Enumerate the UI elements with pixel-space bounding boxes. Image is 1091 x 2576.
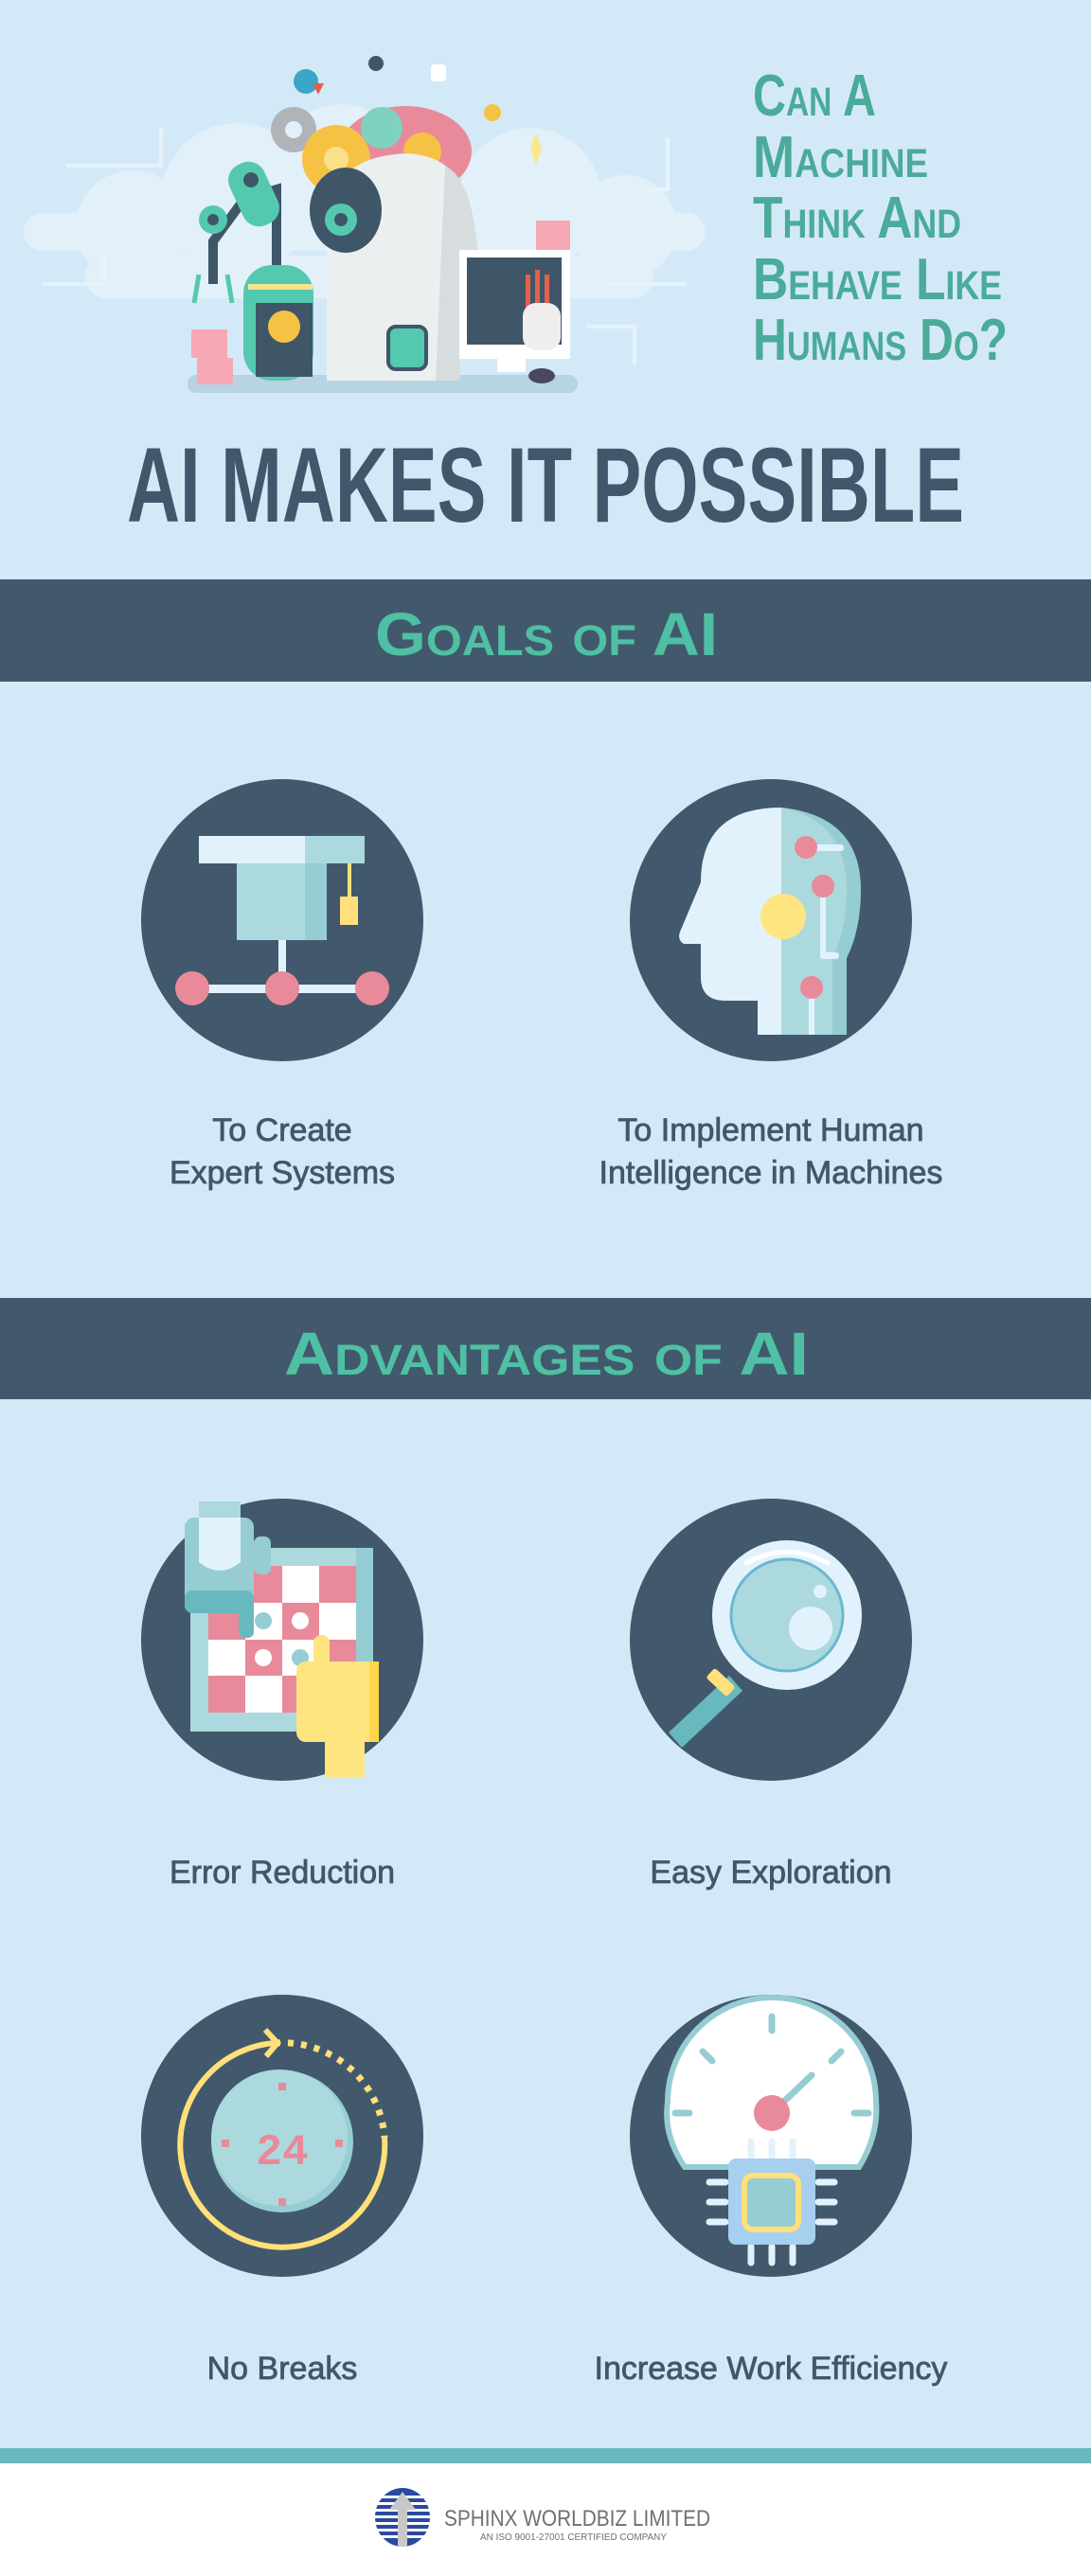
band: goals xyxy=(0,579,1091,682)
monitor xyxy=(459,250,570,359)
hero illustration xyxy=(24,56,706,393)
goal labels xyxy=(170,1112,942,1191)
pink brain xyxy=(339,106,472,197)
title: question: Think And xyxy=(753,186,961,251)
footer logo: AN ISO 9001-27001 CERTIFIED COMPANY xyxy=(480,2532,667,2543)
goal labels: Expert Systems xyxy=(170,1155,395,1191)
circuit lines xyxy=(43,128,687,364)
title: question: Machine xyxy=(753,125,928,190)
advantage: easy exploration icon xyxy=(630,1499,912,1781)
advantage labels row 1: Error Reduction xyxy=(170,1855,395,1891)
advantage: no breaks icon xyxy=(141,1995,423,2277)
footer logo xyxy=(373,2488,710,2547)
title: question xyxy=(753,63,1008,373)
platform xyxy=(188,375,578,393)
advantage labels row 2 xyxy=(207,2351,947,2387)
headphone xyxy=(310,168,382,253)
robot arm xyxy=(194,156,313,381)
clouds xyxy=(24,104,706,298)
head xyxy=(327,153,478,381)
footer logo: SPHINX WORLDBIZ LIMITED xyxy=(444,2506,710,2532)
title: question: Can A xyxy=(753,63,876,129)
band: advantages: Advantages of AI xyxy=(284,1320,809,1388)
advantage: no breaks icon: 24 xyxy=(256,2128,309,2177)
advantage labels row 1 xyxy=(170,1855,892,1891)
pink boxes xyxy=(191,329,227,358)
band: advantages xyxy=(0,1298,1091,1399)
title: question: Behave Like xyxy=(753,247,1002,312)
footer band xyxy=(0,2448,1091,2463)
goal labels: Intelligence in Machines xyxy=(599,1155,942,1191)
advantage labels row 2: No Breaks xyxy=(207,2351,357,2387)
advantage labels row 2: Increase Work Efficiency xyxy=(595,2351,947,2387)
chip xyxy=(388,327,426,369)
advantage: work efficiency icon xyxy=(630,1995,912,2277)
goal: human intelligence icon xyxy=(630,779,912,1061)
band: goals: Goals of AI xyxy=(375,600,718,668)
advantage: error reduction icon xyxy=(141,1499,423,1781)
gears xyxy=(271,107,316,152)
small icons xyxy=(294,69,318,94)
title: question: Humans Do? xyxy=(753,308,1008,373)
goal labels: To Create xyxy=(212,1112,352,1148)
goal labels: To Implement Human xyxy=(617,1112,924,1148)
advantage labels row 1: Easy Exploration xyxy=(650,1855,892,1891)
goal: expert systems icon xyxy=(141,779,423,1061)
